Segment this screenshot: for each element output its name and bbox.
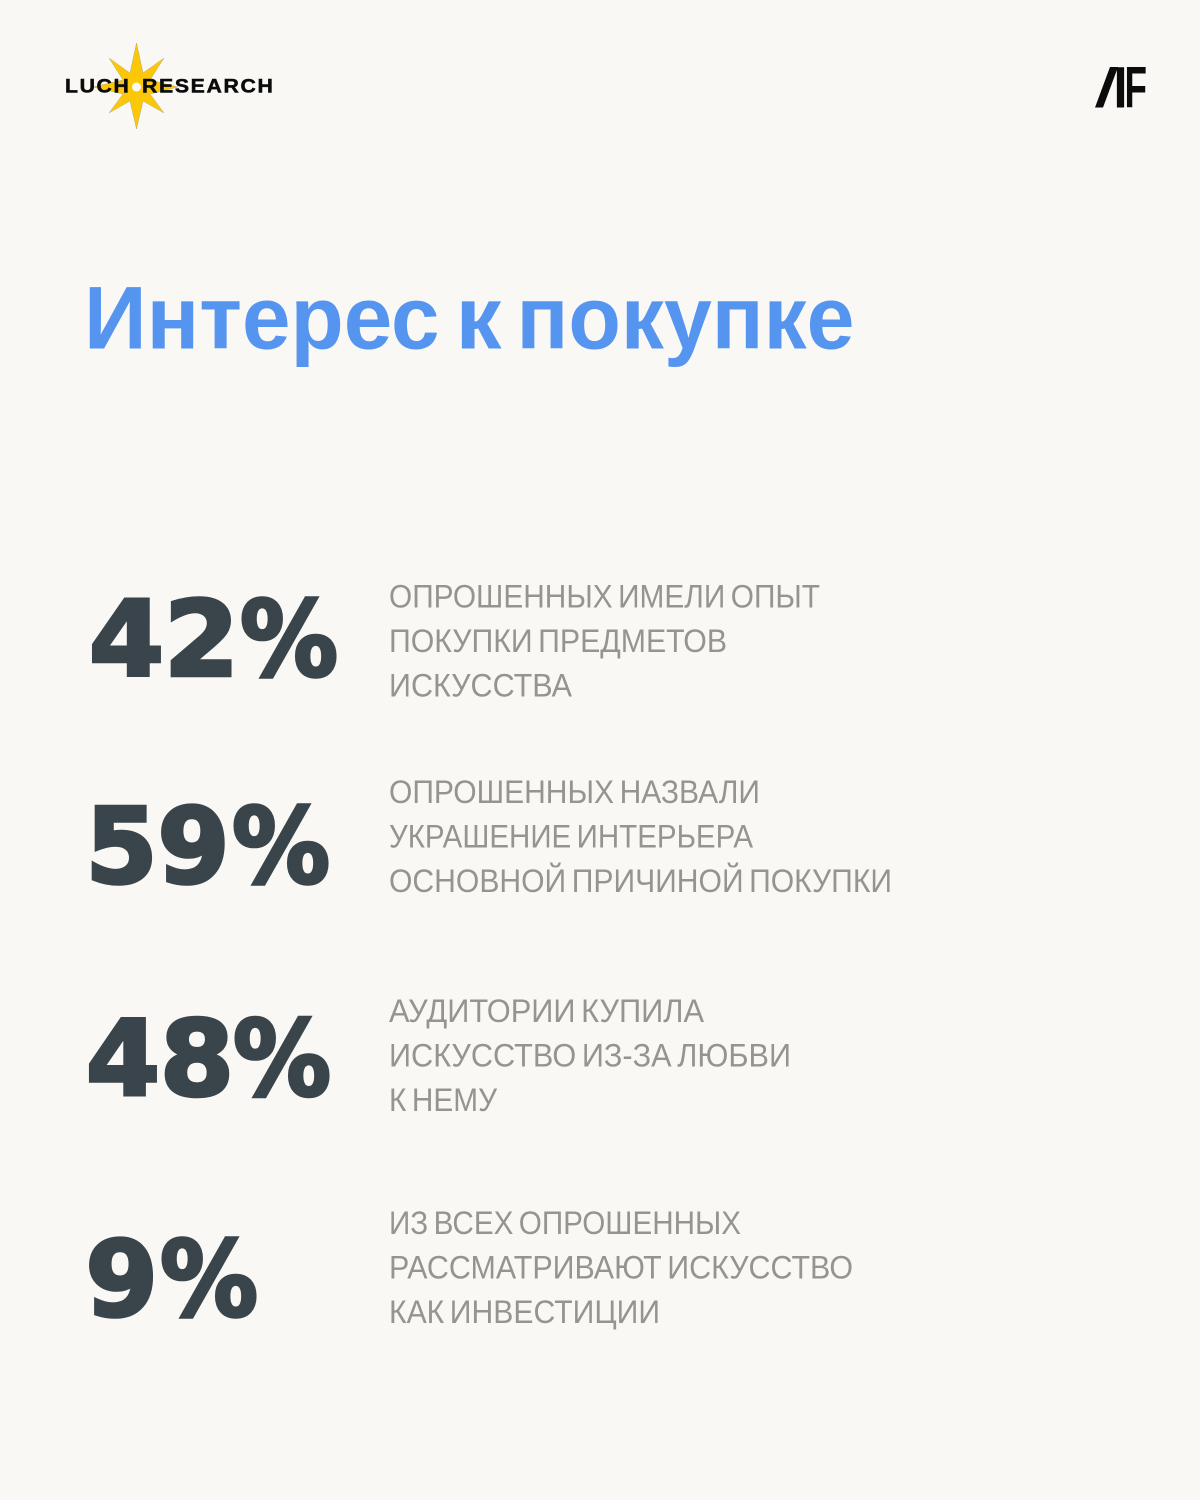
description: 42%: ИСКУССТВА xyxy=(389,668,573,704)
description: 9%: КАК ИНВЕСТИЦИИ xyxy=(389,1294,660,1330)
icon: yellow star xyxy=(93,43,178,129)
description: 48% xyxy=(389,993,791,1118)
description: 42% xyxy=(389,578,820,704)
number: 59%: 59 xyxy=(86,786,230,908)
logo wordmark: LUCH xyxy=(65,76,130,98)
stat: 48% xyxy=(86,993,791,1120)
number: 9%: % xyxy=(160,1218,258,1340)
logo: Luch Research xyxy=(65,43,274,129)
description: 59%: ОСНОВНОЙ ПРИЧИНОЙ ПОКУПКИ xyxy=(389,863,892,899)
number: 42%: % xyxy=(240,578,338,700)
number: 59%: % xyxy=(232,786,330,908)
number: 48%: 48 xyxy=(86,998,234,1120)
description: 9%: ИЗ ВСЕХ ОПРОШЕННЫХ xyxy=(389,1205,741,1241)
description: 42%: ОПРОШЕННЫХ ИМЕЛИ ОПЫТ xyxy=(389,578,820,614)
description: 48%: АУДИТОРИИ КУПИЛА xyxy=(389,993,705,1029)
stat: 59% xyxy=(86,774,892,908)
description: 42%: ПОКУПКИ ПРЕДМЕТОВ xyxy=(389,623,727,659)
stat: 9% xyxy=(86,1205,853,1340)
number: 9%: 9 xyxy=(86,1218,158,1340)
description: 59% xyxy=(389,774,892,899)
logo: Luch Research: RESEARCH xyxy=(142,76,274,98)
logo: AF mark: F xyxy=(1124,56,1147,120)
description: 48%: ИСКУССТВО ИЗ-ЗА ЛЮБВИ xyxy=(389,1038,791,1074)
number: 42%: 42 xyxy=(89,578,239,700)
description: 59%: ОПРОШЕННЫХ НАЗВАЛИ xyxy=(389,774,760,810)
description: 9% xyxy=(389,1205,853,1330)
description: 9%: РАССМАТРИВАЮТ ИСКУССТВО xyxy=(389,1250,853,1286)
description: 48%: К НЕМУ xyxy=(389,1082,498,1118)
title: Интерес xyxy=(84,268,440,368)
logo: AF mark: I xyxy=(1114,56,1128,120)
description: 59%: УКРАШЕНИЕ ИНТЕРЬЕРА xyxy=(389,818,754,854)
stat: 42% xyxy=(89,578,820,704)
logo: AF mark xyxy=(1095,56,1147,120)
title: к xyxy=(456,268,502,368)
title: покупке xyxy=(516,268,854,368)
number: 48%: % xyxy=(233,998,331,1120)
